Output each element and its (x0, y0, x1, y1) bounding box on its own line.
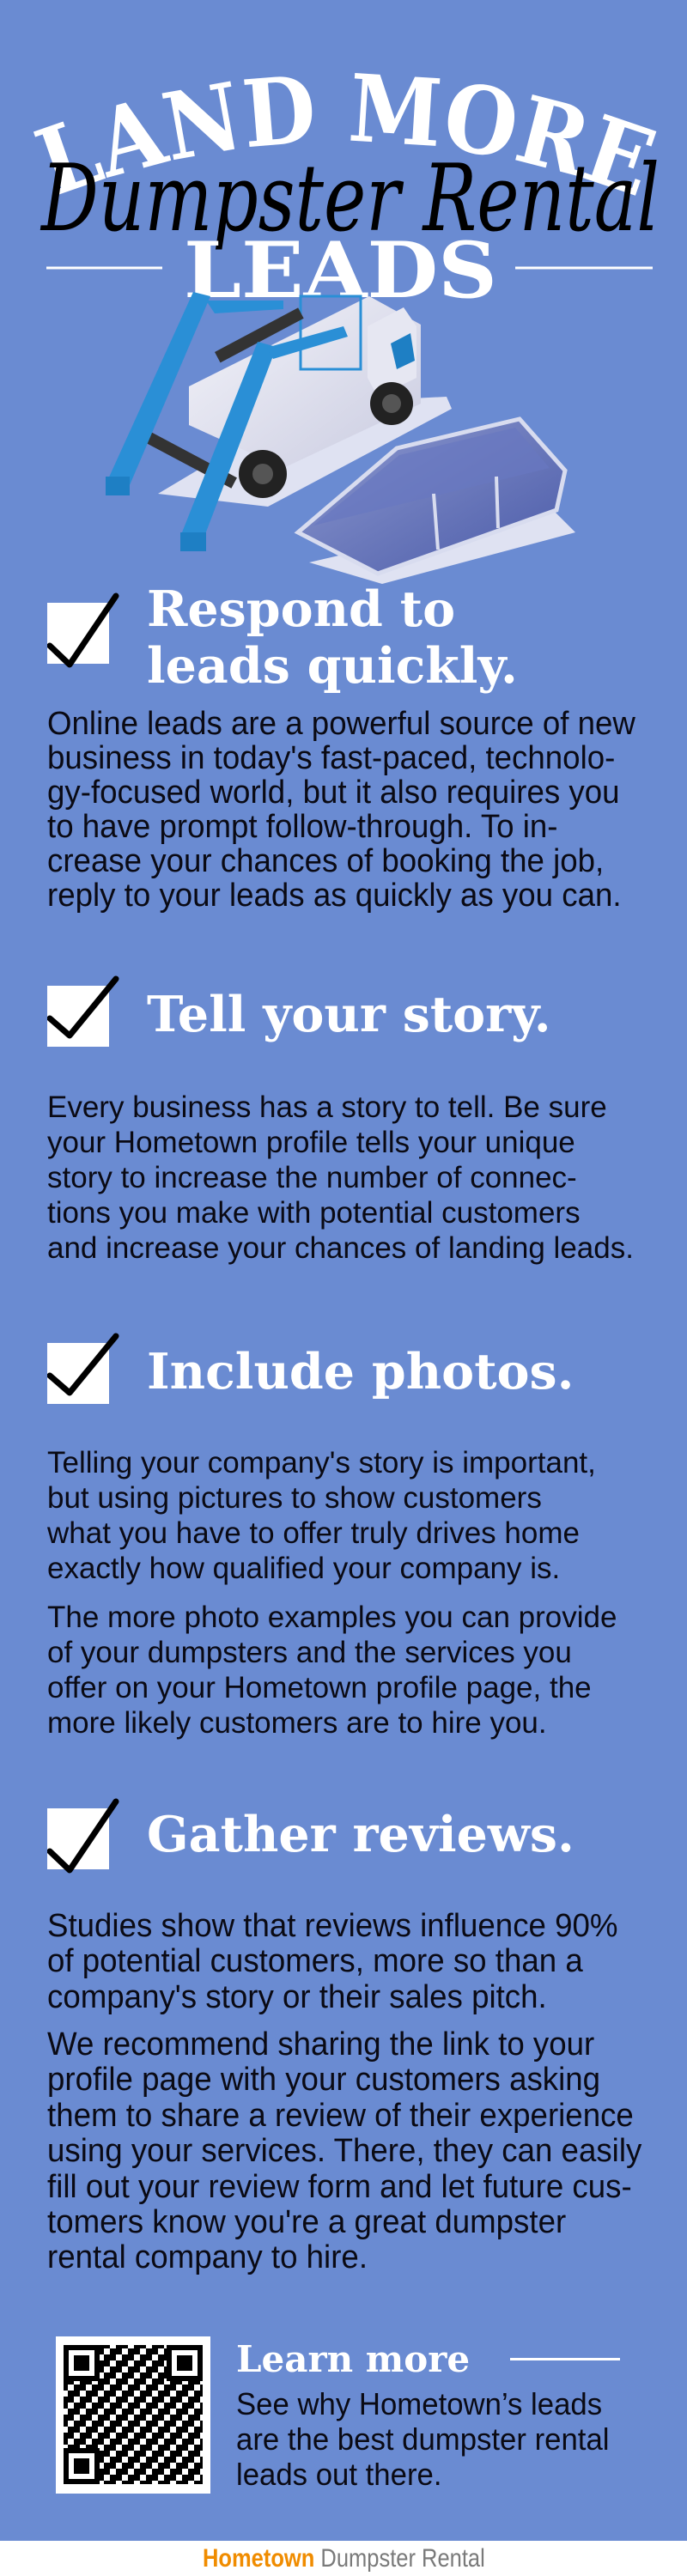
icon: checkbox 4 (47, 1798, 119, 1874)
paragraph 4a (47, 1908, 618, 2015)
text: learn more body: are the best dumpster rental (236, 2421, 609, 2457)
footer (0, 2541, 687, 2576)
paragraph 2 (47, 1091, 634, 1265)
paragraph 4b: profile page with your customers asking (47, 2062, 600, 2098)
text: learn more body: leads out there. (236, 2457, 441, 2492)
section 3 (47, 1333, 617, 1740)
section 1 (47, 580, 635, 914)
paragraph 2: story to increase the number of connec- (47, 1161, 577, 1194)
paragraph 1: crease your chances of booking the job, (47, 843, 604, 879)
title (33, 73, 660, 309)
heading 4: Gather reviews. (147, 1806, 575, 1863)
heading 2: Tell your story. (147, 986, 551, 1043)
icon: checkbox 3 (47, 1333, 119, 1404)
paragraph 4a: company's story or their sales pitch. (47, 1979, 547, 2015)
paragraph 4b: using your services. There, they can easily (47, 2133, 641, 2169)
footer logo: Hometown Dumpster Rental (203, 2544, 484, 2573)
paragraph 1: business in today's fast-paced, technolo- (47, 740, 615, 776)
learn more block (56, 2336, 620, 2494)
paragraph 1: reply to your leads as quickly as you can. (47, 878, 622, 914)
icon: checkbox 2 (47, 975, 119, 1047)
title: LAND MORE: LAND MORE (33, 73, 656, 196)
paragraph 4b: tomers know you're a great dumpster (47, 2204, 566, 2240)
dumpster shadow (309, 507, 575, 584)
paragraph 1 (47, 706, 635, 914)
paragraph 2: tions you make with potential customers (47, 1196, 581, 1230)
paragraph 3a: Telling your company's story is important, (47, 1446, 596, 1479)
paragraph 3b (47, 1601, 617, 1740)
truck shadow (158, 397, 452, 507)
section 4 (47, 1798, 642, 2275)
text: learn more body: See why Hometown’s leads (236, 2386, 602, 2421)
heading 1: Respond to (147, 580, 455, 638)
paragraph 1: gy-focused world, but it also requires you (47, 775, 620, 811)
paragraph 2: and increase your chances of landing leads. (47, 1231, 634, 1265)
paragraph 3a (47, 1446, 596, 1585)
heading 3: Include photos. (147, 1343, 574, 1400)
paragraph 1: to have prompt follow-through. To in- (47, 809, 558, 845)
text: learn more body (236, 2386, 609, 2492)
paragraph 1: Online leads are a powerful source of new (47, 706, 635, 742)
section 2 (47, 975, 634, 1265)
paragraph 2: Every business has a story to tell. Be sure (47, 1091, 607, 1124)
icon: QR code (56, 2336, 210, 2494)
heading 1 (147, 580, 518, 695)
heading 1: leads quickly. (147, 637, 518, 695)
truck (106, 292, 421, 551)
paragraph 4a: Studies show that reviews influence 90% (47, 1908, 618, 1944)
icon: checkbox 1 (47, 592, 119, 668)
paragraph 2: your Hometown profile tells your unique (47, 1126, 575, 1159)
paragraph 3b: offer on your Hometown profile page, the (47, 1671, 592, 1704)
paragraph 4b: them to share a review of their experience (47, 2098, 634, 2134)
paragraph 4b: rental company to hire. (47, 2239, 368, 2275)
dumpster (298, 419, 565, 574)
paragraph 4a: of potential customers, more so than a (47, 1943, 583, 1979)
paragraph 3a: what you have to offer truly drives home (47, 1516, 580, 1550)
paragraph 3a: exactly how qualified your company is. (47, 1552, 560, 1585)
illustration: truck and dumpster (106, 292, 575, 584)
heading: Learn more: Learn more (236, 2338, 470, 2380)
paragraph 4b (47, 2026, 642, 2275)
paragraph 3a: but using pictures to show customers (47, 1481, 542, 1515)
paragraph 4b: fill out your review form and let future cus- (47, 2169, 632, 2205)
paragraph 3b: The more photo examples you can provide (47, 1601, 617, 1634)
paragraph 4b: We recommend sharing the link to your (47, 2026, 594, 2063)
paragraph 3b: of your dumpsters and the services you (47, 1636, 572, 1669)
paragraph 3b: more likely customers are to hire you. (47, 1706, 547, 1740)
